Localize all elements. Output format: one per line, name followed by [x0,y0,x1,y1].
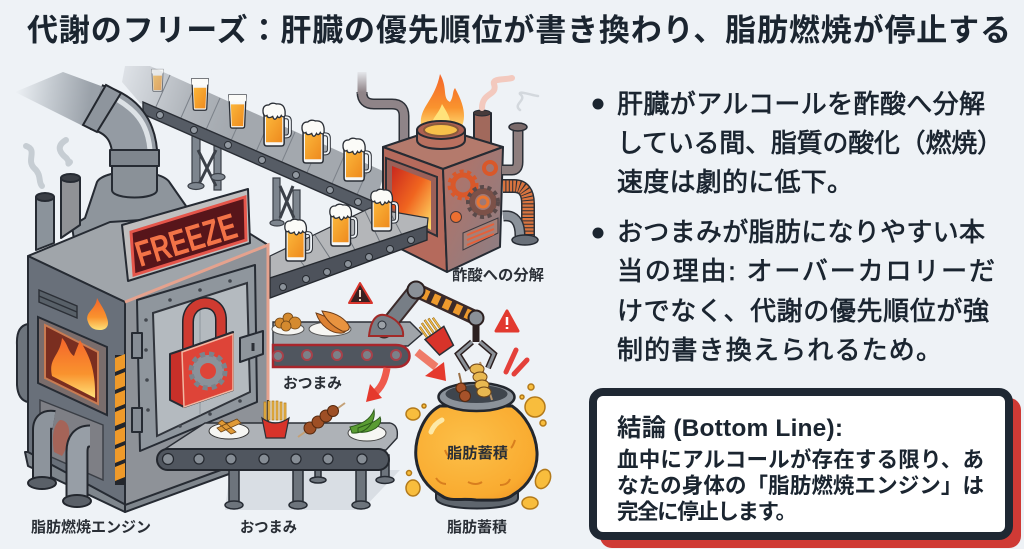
furnace burner ring [417,121,465,149]
lower pipes [42,420,90,498]
bullet one: している間、脂質の酸化（燃焼） [617,128,1003,158]
label: acetate breakdown: 酢酸への分解 [452,266,544,284]
pot rim [438,383,514,411]
side pipes [502,130,518,170]
skewer entering pot [456,362,492,402]
gears [450,162,498,217]
snack plates [272,311,351,336]
bullet two: 制的書き換えられるため。 [617,335,942,365]
robotic arm [369,282,494,370]
dark framed panel [593,392,1009,536]
chimney smoke [482,78,512,108]
engine window with flame [38,317,107,415]
bullet two: 当の理由: オーバーカロリーだ [617,256,995,286]
arm base [369,315,403,336]
beer mugs on lower belt [285,189,397,261]
bullet one: 肝臓がアルコールを酢酸へ分解 [617,89,985,119]
red arrow to lower belt [366,368,387,402]
alert marks [506,350,527,374]
red offset shadow [600,398,1021,548]
title: 代謝のフリーズ：肝臓の優先順位が書き換わり、脂肪燃焼が停止する [27,13,1011,48]
red padlock [170,303,233,407]
bullet two: おつまみが脂肪になりやすい本 [617,217,985,247]
lower beer conveyor [270,189,428,298]
warning triangle left [349,283,372,303]
belt side band [143,102,372,215]
furnace right face [443,147,503,272]
table shadow [225,470,400,510]
FREEZE sign [122,189,250,281]
conclusion body: 血中にアルコールが存在する限り、あ [617,447,984,472]
belt surface [122,66,385,203]
fat-burning engine [15,72,268,512]
belt surface [270,208,428,278]
bullet one [592,89,1003,197]
furnace chimney [474,113,491,145]
furnace flame [421,74,464,130]
lower snack conveyor [157,401,400,510]
dome hood [72,172,190,268]
conclusion box [593,392,1021,548]
vent stacks [36,174,80,250]
door latch [240,331,263,362]
table legs [225,455,394,509]
arm joints [408,282,424,298]
base plate [25,452,126,512]
label: fat accumulation: 脂肪蓄積 [447,518,507,536]
main outlet pipe [15,72,150,160]
smoke wisps [26,140,70,186]
label: snacks lower: おつまみ [240,519,297,536]
floating fries [416,313,456,357]
conclusion body [617,447,984,524]
french fries box [262,401,289,438]
engine top face [28,215,268,302]
engine left face [28,256,125,508]
gripper [458,325,494,370]
belt side band [270,226,427,298]
arm striped segment [416,290,476,318]
lower plate [40,400,103,480]
conclusion heading: 結論 (Bottom Line): [617,414,843,442]
warning triangle right [496,311,518,331]
label: snacks upper: おつまみ [283,375,342,392]
belt slats [155,75,370,199]
furnace top [383,128,503,169]
fat storage pot [406,362,554,509]
conveyor truss supports [188,136,300,226]
belt surface [165,423,397,450]
locked door [132,265,263,451]
padlock gear [196,359,220,383]
furnace control panel [450,212,498,250]
belt slats [290,211,402,267]
hazard stripes [115,354,125,485]
beer glasses on upper belt [152,69,370,181]
upper beer conveyor [122,66,385,226]
conclusion body: 完全に停止します。 [617,500,797,524]
bullet one: 速度は劇的に低下。 [617,167,853,197]
side bump [17,324,28,402]
edamame plate [348,410,386,441]
pot base [436,492,518,508]
yakitori skewer [298,403,345,437]
vent grille [39,290,77,318]
furnace left face [383,147,447,272]
belt band [273,345,410,367]
engine right face [125,245,268,510]
label: fat burning engine: 脂肪燃焼エンジン [31,518,151,536]
conclusion body: なたの身体の「脂肪燃焼エンジン」は [617,474,984,498]
pot body [416,406,537,500]
right acetate furnace [362,72,538,272]
bullet two [592,217,995,365]
fat droplets [406,384,554,509]
bullet two: けでなく、代謝の優先順位が強 [617,296,989,326]
red arrow to pot [417,352,446,381]
belt band [157,449,389,470]
belt surface [273,322,422,346]
FREEZE sign: FREEZE [130,205,242,275]
inlet pipe [362,92,404,144]
middle snack conveyor [272,311,422,367]
furnace window [386,158,437,236]
pot label: 脂肪蓄積 [447,444,508,462]
plate of fried snacks [209,419,249,439]
small flame [87,298,108,330]
